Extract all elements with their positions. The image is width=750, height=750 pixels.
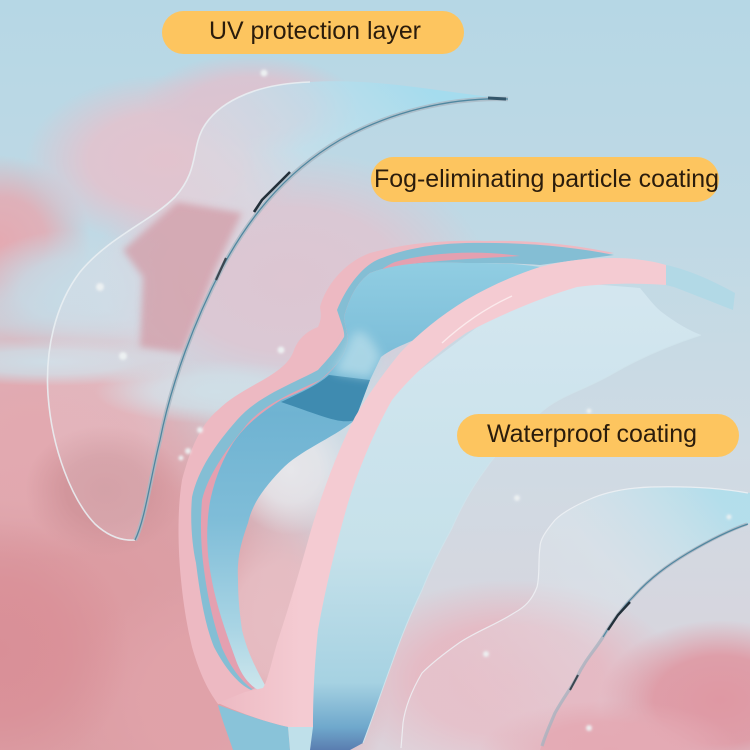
- back lens blue area: [207, 263, 540, 690]
- pink inner strip: [201, 253, 520, 689]
- lens outer edge: [47, 82, 310, 540]
- lens edge: [401, 487, 748, 748]
- dark refraction patch: [281, 375, 370, 421]
- label: UV protection layer: [162, 11, 464, 54]
- lens refraction patch: [123, 202, 242, 353]
- label: Waterproof coating: [457, 414, 739, 457]
- goggle front frame band: [218, 258, 666, 727]
- outer pink crescent: [178, 241, 614, 704]
- lens thick inner edge: [135, 99, 508, 540]
- blue rim: [191, 243, 614, 690]
- label: UV protection layer: UV protection layer: [209, 17, 421, 45]
- label: Fog-eliminating particle coating: Fog-eliminating particle coating: [374, 165, 719, 193]
- strap tail right: [666, 265, 735, 310]
- label: Fog-eliminating particle coating: [371, 157, 719, 202]
- water droplets: [96, 70, 732, 731]
- glare on back lens: [334, 331, 381, 378]
- lower-right lens: [400, 487, 750, 750]
- goggle back frame: [178, 241, 614, 704]
- front frame highlight: [442, 296, 512, 343]
- goggle front lens: [310, 280, 701, 750]
- strap tail bottom: [218, 705, 290, 750]
- lens thick edge: [542, 524, 747, 746]
- label: Waterproof coating: Waterproof coating: [487, 420, 697, 448]
- front lens thin edge: [363, 335, 701, 743]
- left lens: UV protection layer: [47, 81, 508, 540]
